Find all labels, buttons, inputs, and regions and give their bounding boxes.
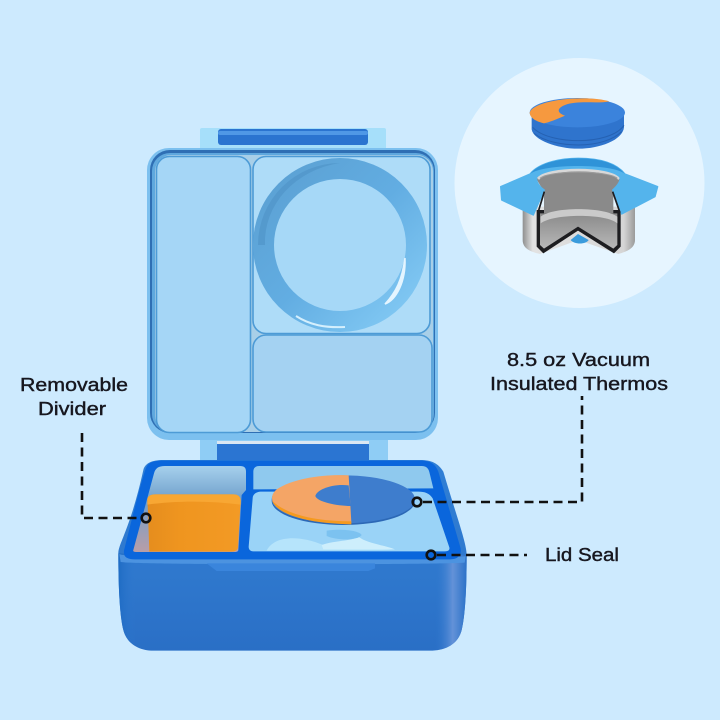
rim light edge [119,554,466,564]
label: removable divider: Divider [38,399,106,419]
lid hinge top [200,128,386,152]
lower right compartment [249,492,449,551]
upper right compartment [253,466,433,489]
lunch box open lid [147,128,438,461]
leader line: lid seal [427,551,527,559]
blue seal rim [124,461,461,559]
label: vacuum insulated thermos: 8.5 oz Vacuum [507,350,650,370]
label: vacuum insulated thermos [490,350,668,394]
label: vacuum insulated thermos: Insulated Thermos [490,374,668,394]
icon: thermos lid [530,98,625,149]
label: lid seal: Lid Seal [545,545,619,565]
lunch box base [118,460,467,651]
top right compartment with ring [253,156,430,334]
leader line: removable divider [82,433,150,522]
icon: thermos insulated cup [501,158,658,254]
wings [501,158,658,215]
label: removable divider [20,375,128,419]
thermos inset circle [454,58,704,308]
lid frame [147,148,438,440]
lid hinge bottom [200,440,388,461]
front latch ridge [207,563,375,571]
box body [118,460,467,651]
left compartment [156,156,250,432]
leader line: vacuum thermos [413,396,582,506]
label: removable divider: Removable [20,375,128,395]
bottom right compartment [253,335,432,432]
upper left compartment [133,466,246,552]
thermos lid in box [272,475,415,525]
removable divider orange [147,494,241,552]
